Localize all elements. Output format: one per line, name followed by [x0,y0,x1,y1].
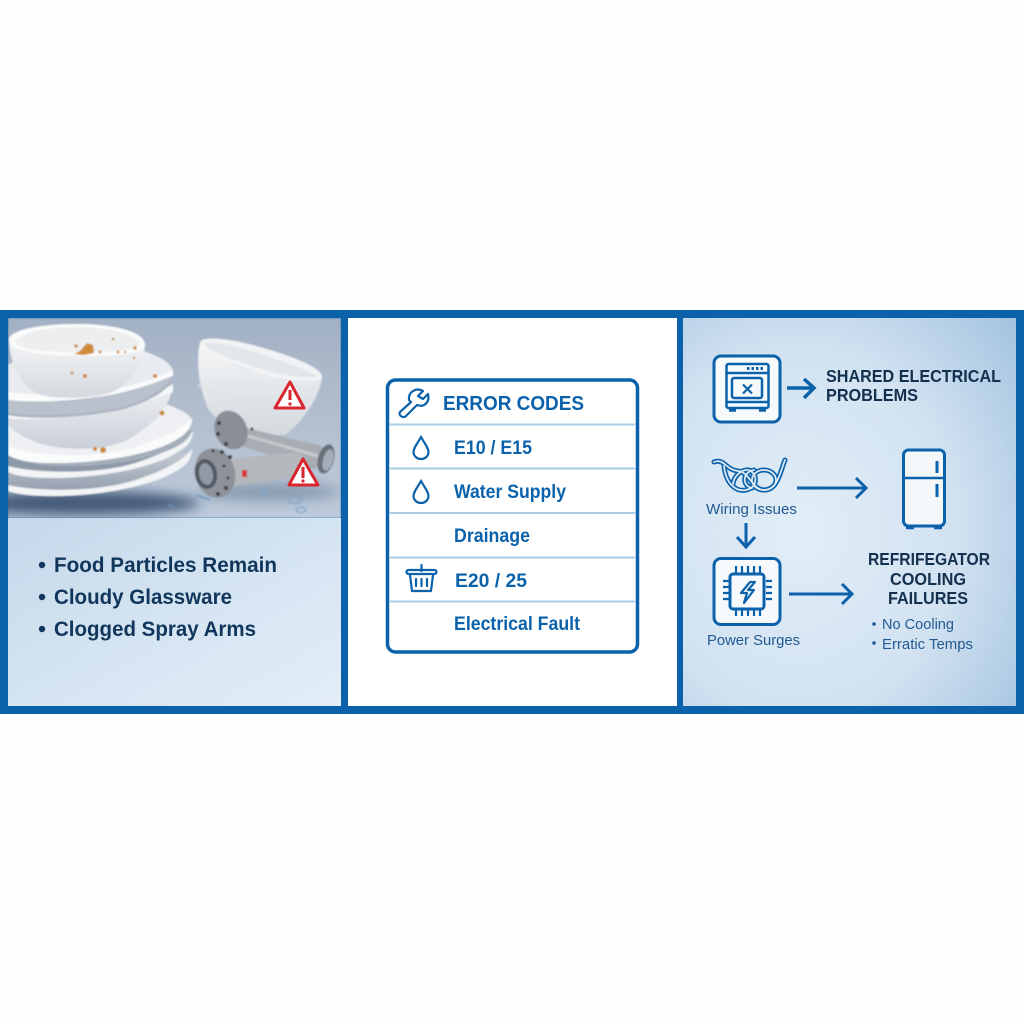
icon: water drop [414,437,428,459]
icon: tangled wires [714,460,785,490]
label: electrical fault: Electrical Fault [454,614,581,635]
icon: power surge chip [714,558,780,624]
heading: refrigerator cooling failures: COOLING [890,569,966,589]
failure symptoms list: Erratic Temps [882,637,973,653]
panel: dishwasher cleaning problems [0,318,341,706]
upper plate [8,381,170,418]
arrow [787,379,814,398]
front spray arm [230,452,301,486]
heading: refrigerator cooling failures: REFRIFEGATOR [868,549,990,569]
symptom list: Clogged Spray Arms [54,618,256,641]
label: power surges: Power Surges [707,633,800,649]
panel: error codes [348,318,677,706]
icon: basket [406,565,436,591]
tilted bowl [198,343,322,435]
arrow [789,584,852,604]
code: E10 / E15: E10 / E15 [454,438,532,459]
arrow [797,478,866,498]
label: water supply: Water Supply [454,482,566,503]
warning icon [289,459,318,485]
warning icon [275,382,304,408]
table title: ERROR CODES [443,393,584,415]
heading: refrigerator cooling failures [868,549,990,608]
symptom list: Food Particles Remain [54,554,277,577]
label: drainage: Drainage [454,526,530,547]
heading: shared electrical problems: SHARED ELECTRICAL [826,366,1001,386]
lower bowl [8,388,172,449]
panel: shared electrical problems [683,318,1016,706]
symptom list [39,554,277,641]
panel background [8,518,341,706]
rear spray arm [242,428,322,470]
blue frame band [0,310,1024,714]
heading: shared electrical problems [826,366,1001,405]
code: E20 / 25: E20 / 25 [455,571,527,592]
photo: dirty dishes and clogged spray arms [0,318,341,518]
icon: faulty oven [714,356,780,422]
label: wiring issues: Wiring Issues [706,502,797,518]
failure symptoms list: No Cooling [882,617,954,633]
icon: wrench [400,390,428,417]
error code table [388,380,638,652]
symptom list: Cloudy Glassware [54,586,232,609]
upper bowl [9,338,145,398]
failure symptoms list [872,617,973,653]
icon: refrigerator [904,450,944,527]
heading: shared electrical problems: PROBLEMS [826,385,918,405]
heading: refrigerator cooling failures: FAILURES [888,588,968,608]
plate stack [8,454,186,489]
arrow [737,523,755,547]
icon: water drop [414,481,428,503]
